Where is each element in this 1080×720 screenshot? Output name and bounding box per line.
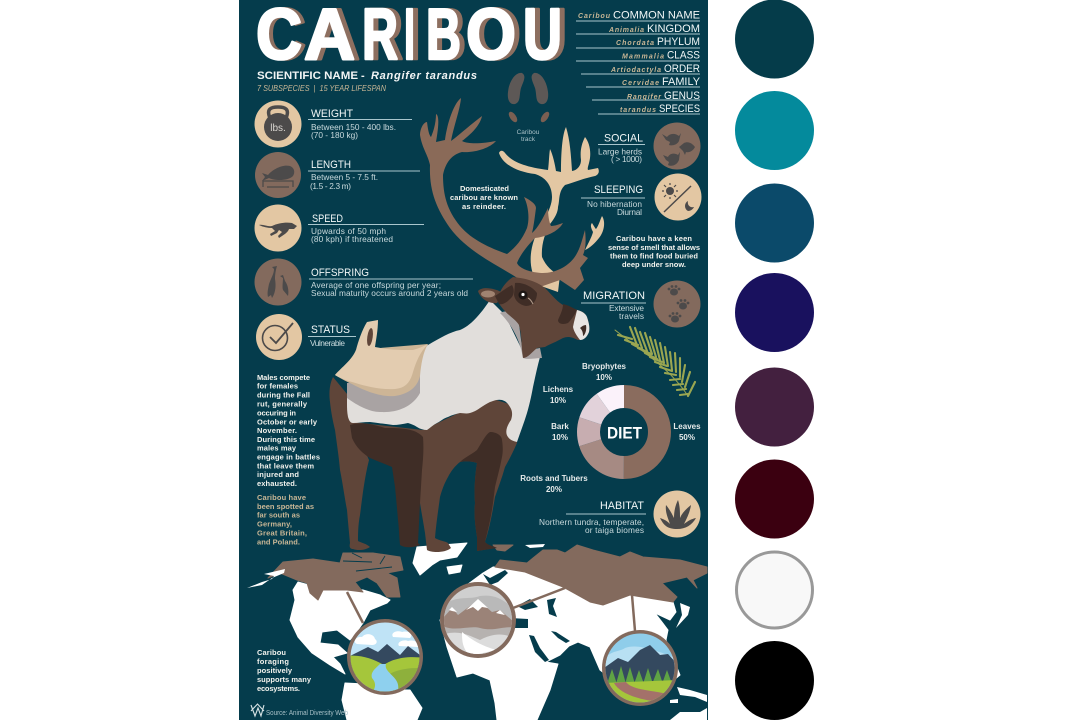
habitat circle: forest [602,630,678,706]
stat: offspring: Average of one offspring per year; [311,280,441,290]
left text: rut: rut, generally [257,400,308,409]
tail [366,328,374,346]
left text: rut: October or early [257,417,318,426]
icon: running cheetah [254,204,302,252]
arctic channels [343,553,392,571]
stat: habitat: HABITAT [600,500,644,512]
stat: length: Between 5 - 7.5 ft. [311,172,378,182]
diet donut chart: 10% [552,433,568,442]
stat: migration: MIGRATION [583,290,645,302]
taxonomy list: GENUS [664,90,700,102]
callout: reindeer: caribou are known [450,193,518,202]
source credit: Source: Animal Diversity Web [266,710,348,717]
stat: weight: WEIGHT [311,108,353,120]
poster background [239,0,708,720]
diet donut chart: 50% [679,433,695,442]
icon: sun and moon [654,174,702,220]
eurasia and africa [440,567,680,720]
stat: migration [581,280,700,328]
left text: range: Germany, [257,520,292,529]
left text: rut: occuring in [257,408,296,417]
scientific name: Rangifer tarandus [371,70,477,82]
fern leaf [615,327,695,396]
taxonomy list [576,10,701,115]
japan and kamchatka arc [676,603,690,628]
scientific name: - [361,70,365,82]
taxonomy list: Artiodactyla [610,67,661,74]
inland seas [483,570,570,662]
taxonomy list: COMMON NAME [613,10,700,22]
line to mountain habitat [513,588,565,608]
taxonomy list: ORDER [664,63,700,75]
left text: rut: for females [257,382,298,391]
rear near leg [329,377,370,550]
diet donut chart: Bryophytes [582,362,627,371]
rear far leg shadow [350,423,423,547]
icon: kettlebell [254,100,302,148]
left text: range: been spotted as [257,502,314,511]
small tine of rear antler [585,216,604,250]
stat: social [598,122,700,170]
arctic islands [525,544,545,548]
taxonomy list: KINGDOM [647,23,700,35]
diet donut chart: 10% [550,396,566,405]
taxonomy list: tarandus [620,107,656,114]
taxonomy list: SPECIES [659,103,700,115]
diet donut chart: Leaves [673,422,701,431]
left text: rut: that leave them [257,461,314,470]
icon: two birds [254,258,302,306]
left text: rut: injured and [257,470,299,479]
stat: length: (1.5 - 2.3 m) [310,181,351,191]
diet donut chart: Roots and Tubers [520,474,588,483]
stat: weight: Between 150 - 400 lbs. [311,122,396,132]
ear [478,288,503,303]
gray flank band [347,376,420,412]
stat: social: SOCIAL [604,133,643,145]
stat: speed: SPEED [312,213,343,225]
east asian islands and australia [670,687,707,720]
body and near front leg [352,398,517,552]
left text: rut: engage in battles [257,453,320,462]
left text: range: Caribou have [257,493,306,502]
greenland and iceland [413,543,467,575]
left text: rut: during the Fall [257,391,310,400]
diet donut chart: 20% [546,485,562,494]
left text: rut: November. [257,426,297,435]
diet donut chart [520,362,701,494]
scientific name: SCIENTIFIC NAME [257,70,358,82]
head [497,277,589,358]
line to forest habitat [632,595,635,631]
north america [290,582,390,674]
stat: speed [254,204,424,252]
habitat circle: river valley [347,619,423,695]
left text: rut: Males compete [257,373,310,382]
left text: range: and Poland. [257,537,300,546]
stat: sleeping: No hibernation [587,199,642,209]
taxonomy list: FAMILY [662,76,701,88]
far front leg shadow [460,432,503,551]
stat: habitat: or taiga biomes [585,525,644,535]
icon: fish school [654,122,700,170]
tundra range eurasia [493,545,707,605]
stat: length: LENGTH [311,159,351,171]
icon: agave plant [654,490,700,538]
stat: weight [254,100,412,148]
stat: status [256,314,356,360]
taxonomy list: Caribou [578,13,611,20]
callout: sense of smell: sense of smell that allows [608,243,700,252]
callout: sense of smell: them to find food buried [610,252,698,260]
stat: migration: Extensive [609,303,644,313]
foraging note [257,648,312,693]
stat: offspring: OFFSPRING [311,267,369,279]
foraging note: positively [257,666,293,675]
stat: habitat [539,490,700,538]
icon: caribou track: track [521,136,536,143]
source credit [251,704,348,717]
taxonomy list: Cervidae [622,80,659,87]
muzzle [573,310,589,340]
alaska highlight [247,569,285,588]
left text: range [257,493,314,546]
taxonomy list: Chordata [616,40,654,47]
icon: check mark [256,314,302,360]
diet donut chart: 10% [596,373,612,382]
taxonomy list: Mammalia [622,54,664,60]
callout: sense of smell: Caribou have a keen [616,234,692,243]
callout: sense of smell [608,234,700,269]
stat: migration: travels [619,311,644,321]
foraging note: foraging [257,657,289,666]
stat: social: Large herds [598,146,642,156]
icon: measured animal [255,152,301,198]
stat: weight: (70 - 180 kg) [311,130,358,140]
stat: speed: (80 kph) if threatened [311,234,393,244]
stat: sleeping: SLEEPING [594,184,643,196]
saddle patch [335,320,428,389]
rear antler [499,127,599,292]
icon: caribou track: Caribou [517,129,540,136]
icon: paw prints [654,280,700,328]
left text: rut: males may [257,444,297,453]
line to river habitat [347,592,363,623]
stat: offspring [254,258,473,306]
stat: status: Vulnerable [310,338,345,348]
foraging note: ecosystems. [257,684,300,693]
callout: sense of smell: deep under snow. [622,260,686,269]
stat: habitat: Northern tundra, temperate, [539,517,644,527]
title [256,0,567,75]
subspecies and lifespan: 7 SUBSPECIES | 15 YEAR LIFESPAN [257,84,386,93]
callout: reindeer: as reindeer. [462,202,506,211]
taxonomy list: Animalia [608,27,644,34]
neck ruff [500,311,542,359]
icon: caribou track [507,73,551,143]
left text: rut [257,373,320,488]
south america [342,683,422,720]
left text: range: Great Britain, [257,529,307,538]
taxonomy list: PHYLUM [657,36,700,48]
scientific name [257,70,477,82]
stat: speed: Upwards of 50 mph [311,226,386,236]
diet donut chart: Bark [551,422,569,431]
callout: reindeer: Domesticated [460,184,509,193]
foraging note: Caribou [257,648,286,657]
callout: reindeer [450,184,518,211]
saddle shading [335,344,428,396]
foraging note: supports many [257,675,312,684]
eye [518,290,533,304]
reindeer illustration [329,98,604,552]
diet donut chart: Lichens [543,385,574,394]
habitat circle: snowy mountain [440,582,516,660]
diet donut chart: DIET [607,424,643,442]
colour palette swatches [735,0,814,720]
taxonomy list: Rangifer [627,94,662,101]
face markings [495,283,577,324]
stat: social: ( > 1000) [611,154,642,164]
stat: length [255,152,420,198]
stat: offspring: Sexual maturity occurs around 2 years old [311,288,468,298]
taxonomy list: CLASS [667,50,700,62]
stat: sleeping [581,174,702,220]
left text: rut: During this time [257,435,315,444]
front antler [420,98,588,290]
left text: rut: exhausted. [257,479,297,488]
icon: kettlebell: lbs. [270,123,286,134]
tundra range north america [268,553,403,600]
white coat [347,300,540,442]
world map [247,543,707,720]
stat: sleeping: Diurnal [617,207,642,217]
left text: range: far south as [257,511,300,520]
stat: status: STATUS [311,324,350,336]
